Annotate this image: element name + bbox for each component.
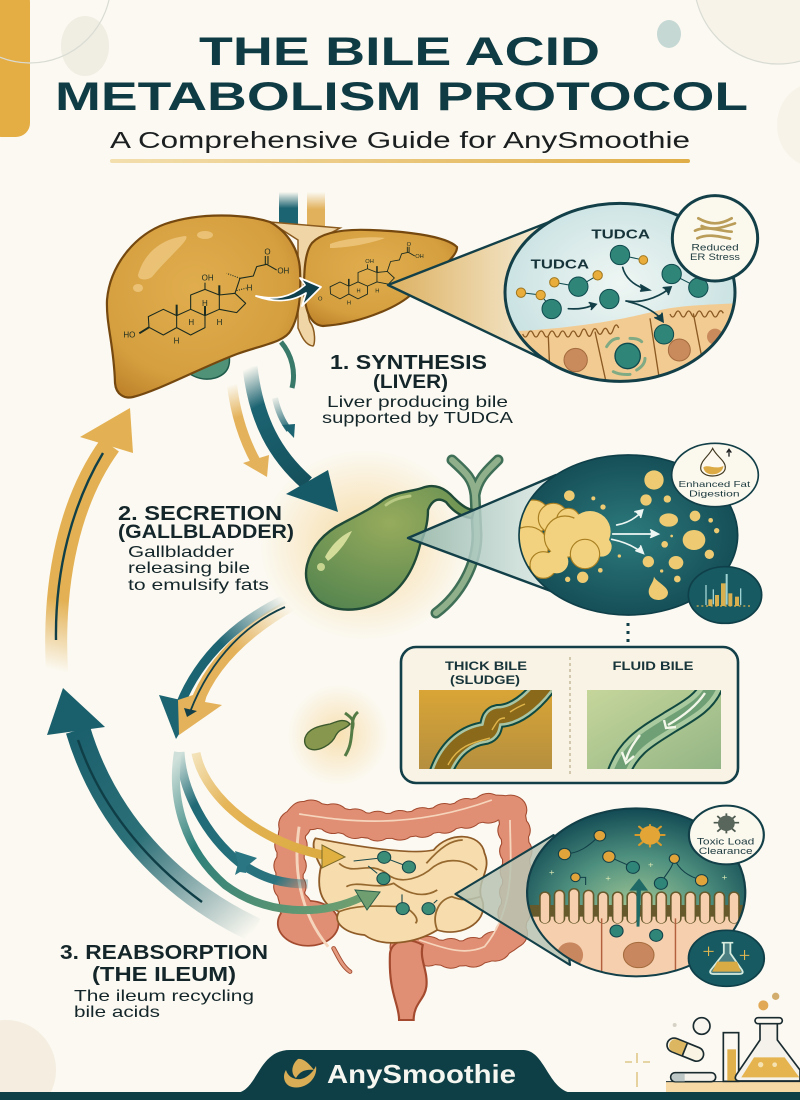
sparkles: + — [648, 860, 653, 869]
liver — [107, 216, 457, 397]
fat droplets — [564, 470, 719, 600]
pills — [665, 1018, 716, 1082]
arrow: left teal return — [47, 688, 255, 930]
arrow: thin teal — [275, 398, 295, 438]
bubble: TUDCA cellular view — [500, 196, 758, 390]
label: 2. secretion: to emulsify fats — [128, 577, 269, 594]
molecule arrows — [568, 267, 671, 322]
steroid molecule: left lobe: H — [217, 318, 223, 327]
falciform ligament — [270, 222, 340, 346]
upward absorption arrow — [629, 878, 648, 927]
thick bile heading: THICK BILE — [445, 659, 527, 673]
brand name: AnySmoothie — [327, 1059, 516, 1089]
label: 1. synthesis — [322, 352, 513, 427]
steroid molecule: left lobe: HO — [123, 331, 135, 340]
bile duct — [436, 460, 498, 613]
arrow: between liver lobes — [256, 278, 321, 306]
label: 2. secretion: 2. SECRETION — [118, 503, 282, 525]
left lobe — [107, 216, 300, 397]
label: 3. reabsorption: The ileum recycling — [74, 988, 254, 1005]
steroid molecule: right lobe: OH — [365, 259, 374, 265]
callout: toxic load clearance: Clearance — [699, 845, 753, 856]
hepatic vessels — [279, 192, 325, 230]
logo — [284, 1059, 316, 1087]
steroid molecule: right lobe: H — [347, 301, 351, 307]
steroid molecule: left lobe: H — [174, 337, 180, 346]
zoom cone: ileum — [455, 835, 570, 965]
thick bile heading — [445, 659, 527, 687]
steroid molecule: right lobe: O — [318, 297, 323, 303]
bubble: villi absorption — [521, 808, 754, 983]
badge: flask — [689, 930, 764, 986]
label: 2. secretion — [118, 503, 294, 594]
sparkles: + — [549, 867, 555, 877]
steroid molecule: left lobe — [123, 248, 290, 346]
thick bile heading: (SLUDGE) — [450, 673, 520, 687]
arrow: teal into intestine — [180, 752, 308, 884]
arrow: gold to gallbladder — [232, 385, 269, 477]
large intestine — [277, 800, 516, 953]
bubble outline — [519, 455, 738, 615]
shelf — [666, 1082, 800, 1092]
zoom cone: gallbladder — [408, 475, 559, 594]
callout: enhanced fat digestion: Digestion — [689, 489, 740, 499]
steroid molecule: left lobe: OH — [277, 266, 290, 275]
label: 2. secretion: (GALLBLADDER) — [118, 522, 294, 543]
dotted connector — [626, 623, 630, 642]
steroid molecule: right lobe: OH — [415, 254, 424, 260]
small gallbladder illustration — [288, 685, 388, 785]
test tube — [723, 1033, 739, 1081]
steroid molecule: left lobe: H — [247, 284, 253, 293]
steroid molecule: right lobe — [318, 242, 424, 307]
arrow: gold into intestine — [196, 753, 345, 868]
lab equipment — [665, 993, 800, 1092]
steroid molecule: right lobe: H — [356, 288, 361, 294]
panel: thick vs fluid bile — [401, 647, 738, 783]
subtitle: A Comprehensive Guide for AnySmoothie — [110, 127, 690, 153]
bubble outline — [505, 203, 735, 381]
rectum — [390, 940, 427, 1020]
steroid molecule: left lobe: H — [202, 299, 208, 308]
callout: reduced ER stress: Reduced — [691, 242, 739, 252]
zoom cone: liver — [388, 219, 557, 361]
sparkles: + — [605, 873, 611, 883]
bubble outline — [527, 808, 745, 976]
arrow: liver to gallbladder teal — [250, 367, 338, 512]
steroid molecule: right lobe: H — [375, 288, 379, 294]
title: METABOLISM PROTOCOL — [55, 75, 748, 119]
small intestine — [314, 837, 487, 943]
callout: reduced ER stress: ER Stress — [690, 252, 741, 262]
callout: reduced ER stress — [672, 196, 758, 281]
liver highlights — [133, 231, 385, 292]
callout: enhanced fat digestion: Enhanced Fat — [678, 479, 751, 489]
arrow: left gold return — [56, 408, 133, 672]
sparkles: + — [722, 872, 727, 882]
gallbladder — [306, 486, 474, 610]
zoom cone and absorption bubble — [455, 806, 764, 986]
arrow: teal down-left from gallbladder — [159, 598, 287, 739]
sparkles — [549, 860, 727, 883]
subtitle underline — [110, 159, 690, 163]
callout: toxic load clearance — [689, 806, 764, 864]
TUDCA molecules — [516, 245, 708, 319]
label: 2. secretion: releasing bile — [128, 560, 250, 577]
fat globule cluster — [508, 500, 612, 578]
image: fluid bile duct — [587, 690, 721, 769]
label: 1. synthesis: Liver producing bile — [327, 394, 508, 411]
flask — [735, 993, 800, 1081]
steroid molecule: left lobe: O — [264, 248, 271, 257]
label: 3. reabsorption: (THE ILEUM) — [92, 964, 236, 986]
label: 1. synthesis: (LIVER) — [373, 372, 448, 393]
steroid molecule: left lobe: OH — [202, 274, 214, 283]
label: 1. synthesis: 1. SYNTHESIS — [330, 352, 487, 374]
gallbladder under liver — [182, 350, 229, 379]
label: 3. reabsorption: 3. REABSORPTION — [60, 942, 268, 964]
callout: toxic load clearance: Toxic Load — [697, 836, 754, 846]
callout: enhanced fat digestion — [672, 443, 758, 507]
bile acid molecules — [354, 851, 437, 915]
TUDCA labels — [531, 228, 650, 271]
footer — [0, 1050, 800, 1100]
title — [55, 30, 748, 119]
steroid molecule: left lobe: H — [188, 318, 194, 327]
TUDCA labels: TUDCA — [591, 228, 650, 242]
label: 1. synthesis: supported by TUDCA — [322, 410, 513, 427]
toxin — [635, 825, 665, 847]
badge: bar chart — [688, 567, 762, 623]
arrow: green into intestine — [176, 752, 380, 910]
gallbladder glow — [260, 450, 470, 640]
image: thick bile duct — [419, 690, 552, 769]
sparkle — [625, 1053, 650, 1087]
appendix — [334, 948, 350, 972]
title: THE BILE ACID — [199, 30, 600, 74]
arrow: gold down-left from gallbladder — [178, 604, 292, 735]
emulsify arrows — [612, 510, 658, 553]
TUDCA labels: TUDCA — [531, 257, 589, 271]
steroid molecule: right lobe: O — [407, 242, 412, 248]
molecules — [558, 830, 708, 941]
fluid bile heading: FLUID BILE — [612, 659, 694, 673]
label: 2. secretion: Gallbladder — [128, 544, 235, 561]
green bile duct from liver — [281, 342, 294, 388]
label: 3. reabsorption: bile acids — [74, 1004, 160, 1021]
intestines group — [277, 800, 516, 1020]
hepatocyte cells — [518, 304, 732, 380]
label: 3. reabsorption — [60, 942, 268, 1021]
bubble: fat emulsification — [508, 443, 762, 623]
right lobe — [304, 230, 457, 326]
